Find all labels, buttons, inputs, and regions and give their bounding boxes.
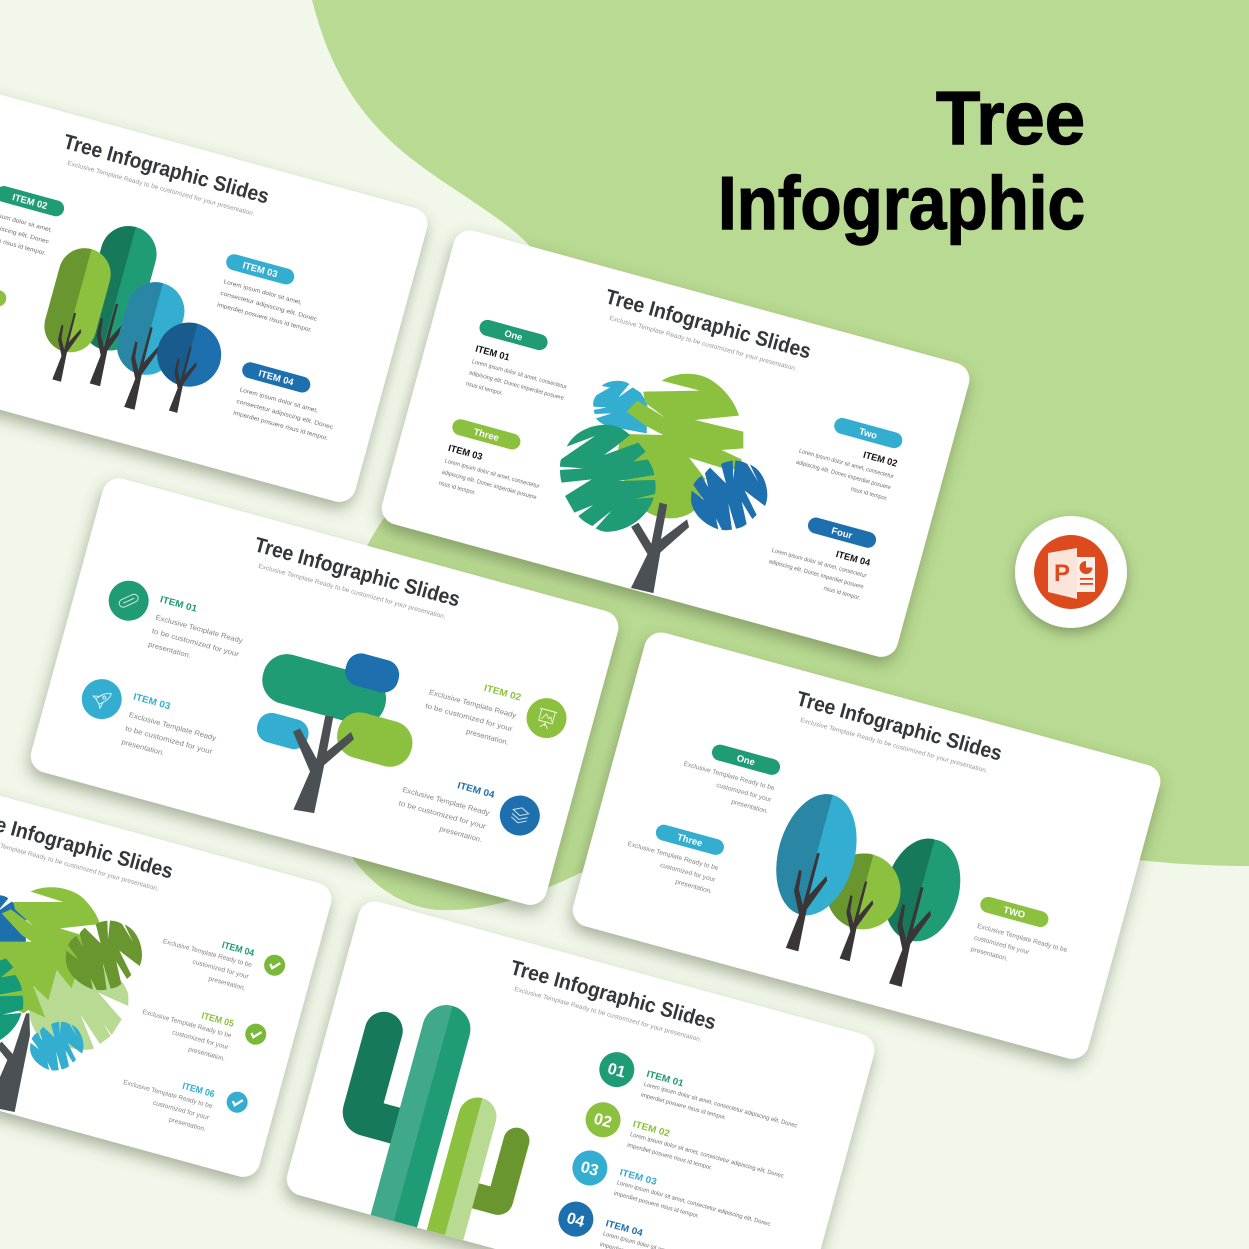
item 02 text	[626, 1119, 788, 1190]
slide 4: three oval trees	[569, 629, 1164, 1063]
pill: item 02: ITEM 02	[11, 192, 49, 212]
item 04 block: ITEM 04	[835, 549, 872, 569]
slide title: Tree Infographic Slides	[603, 285, 813, 364]
pill: item 03	[224, 252, 296, 286]
stem: teal	[371, 1000, 476, 1227]
tree: teal capsule	[66, 220, 163, 392]
text: Three: customized for your	[659, 862, 717, 884]
item 04 text: ITEM 04	[456, 780, 496, 801]
badge circle	[1015, 516, 1127, 628]
tree: teal oval	[861, 830, 971, 995]
item 01 text: to be customized for your	[151, 626, 241, 659]
item 03 block: risus id tempor.	[438, 481, 476, 497]
text: Two: presentation.	[970, 946, 1009, 963]
text: Three	[620, 841, 720, 896]
item 01 text: ITEM 01	[159, 594, 199, 615]
item 01 text	[640, 1069, 801, 1140]
badge 02	[582, 1098, 625, 1141]
leaf: lime	[618, 374, 743, 518]
leaf: blue	[691, 461, 767, 530]
pill: Three	[654, 823, 726, 857]
slide card	[0, 747, 335, 1181]
item 01 text: imperdiet posuere risus id tempor.	[640, 1092, 727, 1122]
badge 03	[568, 1146, 611, 1189]
item 04 text: Exclusive Template Ready to be	[162, 938, 253, 969]
icon: layers	[495, 791, 544, 840]
monstera tree illustration	[560, 374, 767, 599]
green background blob	[312, 0, 1249, 910]
item 02 text: ITEM 02	[631, 1119, 671, 1140]
stem: lime half	[427, 1093, 482, 1235]
text: item 02	[0, 202, 53, 257]
arm: olive	[471, 1121, 532, 1218]
slide 3: rounded block tree with icons	[27, 475, 622, 909]
pill: Two	[832, 416, 904, 450]
canopy: lime	[332, 707, 417, 772]
big cactus	[318, 985, 476, 1227]
pill: Two	[978, 895, 1050, 929]
slide card	[0, 72, 431, 506]
item 04 text: presentation.	[438, 824, 483, 844]
front page with P: P	[1054, 560, 1070, 587]
trunk	[273, 708, 358, 820]
trunk	[0, 1013, 30, 1112]
item 05 text: Exclusive Template Ready to be	[142, 1009, 233, 1040]
slide card	[27, 475, 622, 909]
pill: Three	[450, 417, 522, 451]
check icon: item 06	[224, 1089, 250, 1115]
text: One: customized for your	[715, 782, 773, 804]
item 04 text	[394, 767, 496, 844]
item 01 text: Exclusive Template Ready	[155, 613, 244, 645]
text: item 04	[232, 387, 337, 443]
monstera tree illustration	[0, 887, 142, 1112]
text: One: presentation.	[730, 799, 769, 815]
leaf: sky	[30, 1022, 83, 1070]
pill: One	[710, 743, 782, 777]
tree: blue round	[143, 315, 228, 420]
tree: sky oval	[754, 785, 869, 959]
item 01 block: Lorem ipsum dolor sit amet, consectetur	[471, 359, 567, 391]
item 03 text: presentation.	[121, 737, 165, 757]
trunk	[616, 497, 693, 599]
item 04 text: to be customized for your	[398, 798, 488, 831]
pill: One: One	[735, 753, 756, 768]
block tree illustration	[231, 629, 433, 835]
check icon: item 04	[262, 952, 287, 978]
icon: paperclip	[104, 576, 153, 625]
text: item 04: Lorem ipsum dolor sit amet,	[239, 387, 319, 415]
badge 04: 04	[565, 1210, 586, 1231]
item 03 text: ITEM 03	[618, 1167, 658, 1188]
pill: item 04	[240, 360, 312, 394]
pill: One: One	[503, 328, 524, 344]
item 03 block: adipiscing elit. Donec imperdiet posuere	[441, 470, 538, 501]
pill: Three: Three	[472, 427, 500, 444]
slide 6: multi-leaf monstera tree	[0, 747, 335, 1200]
item 03 block: Lorem ipsum dolor sit amet, consectetur	[444, 458, 540, 490]
item 04 text: Exclusive Template Ready	[401, 785, 491, 817]
item 06 text: presentation.	[168, 1116, 207, 1133]
tree: lime capsule	[31, 242, 117, 387]
arm: dark	[337, 1007, 424, 1144]
item 02 text: Lorem ipsum dolor sit amet, consectetur adipiscing elit. Donec	[629, 1132, 784, 1180]
text: item 03: Lorem ipsum dolor sit amet,	[223, 279, 303, 306]
slide 2: monstera tree	[371, 227, 973, 688]
stem: pale half	[445, 1098, 501, 1240]
slide card	[283, 898, 878, 1249]
item 05 text: presentation.	[187, 1046, 226, 1063]
item 03 text: Lorem ipsum dolor sit amet, consectetur adipiscing elit. Donec	[616, 1180, 771, 1228]
canopy: blue	[342, 650, 403, 696]
item 02 text	[421, 669, 523, 747]
item 01 block: risus id tempor.	[465, 381, 504, 397]
item 01 text: presentation.	[147, 640, 192, 660]
item 04 text	[156, 925, 257, 992]
item 03 text	[120, 692, 223, 770]
item 01 block	[465, 344, 572, 413]
item 02 text: to be customized for your	[424, 701, 514, 734]
item 03 block	[438, 443, 545, 512]
item 05 text: customized for your	[171, 1029, 230, 1051]
back page with pie	[1077, 557, 1095, 592]
pill: Four: Four	[830, 526, 854, 542]
item 06 text	[116, 1066, 217, 1133]
item 02 block: Lorem ipsum dolor sit amet, consectetur	[798, 449, 894, 480]
leaf: sky	[593, 381, 647, 433]
item 04 text: customized for your	[192, 959, 250, 981]
item 03 text: imperdiet posuere risus id tempor.	[613, 1191, 700, 1220]
text: One	[676, 761, 776, 816]
slide subtitle: Exclusive Template Ready to be customized for your presentation.	[513, 986, 703, 1044]
badge 01	[595, 1048, 638, 1091]
text: Two	[970, 923, 1068, 977]
slide 1: four capsule trees	[0, 72, 431, 506]
title line: Infographic: Infographic	[718, 161, 1085, 245]
slide 5: cactus	[283, 898, 878, 1249]
text: item 04: consectetur adipiscing elit. Donec	[236, 399, 334, 431]
slide card	[378, 227, 973, 661]
item 01 text: Lorem ipsum dolor sit amet, consectetur adipiscing elit. Donec	[643, 1082, 798, 1130]
item 04 text: presentation.	[208, 975, 246, 992]
slide subtitle: Exclusive Template Ready to be customized for your presentation.	[66, 160, 256, 218]
leaf: blue	[0, 895, 26, 948]
slide subtitle: Exclusive Template Ready to be customized for your presentation.	[257, 563, 447, 621]
item 02 block	[792, 433, 899, 503]
pill: item 03: ITEM 03	[241, 260, 279, 280]
canopy: teal	[257, 649, 392, 730]
text: One: Exclusive Template Ready to be	[683, 761, 776, 792]
stem: lighter half	[371, 1000, 453, 1221]
leaf: teal	[560, 425, 656, 532]
item 02 text: Exclusive Template Ready	[428, 687, 518, 720]
item 06 text: Exclusive Template Ready to be	[122, 1079, 213, 1110]
text: Three: Exclusive Template Ready to be	[627, 841, 719, 872]
canopy: sky	[254, 710, 312, 752]
pill: Two: Two	[858, 426, 878, 442]
icon: PowerPoint badge	[1015, 516, 1127, 628]
item 01 text: ITEM 01	[645, 1069, 685, 1090]
pill: item 01	[0, 274, 8, 308]
pill: Three: Three	[676, 832, 704, 849]
tree: sky capsule	[101, 276, 191, 416]
text: Two: customized for your	[973, 934, 1031, 956]
item 03 text	[613, 1167, 775, 1239]
item 03 text: ITEM 03	[132, 692, 172, 712]
pill: item 04: ITEM 04	[257, 368, 295, 389]
item 04 block: risus id tempor.	[823, 586, 861, 602]
text: item 03: imperdiet posuere risus id tempor.	[216, 302, 313, 334]
item 05 text: ITEM 05	[200, 1010, 236, 1030]
badge 02: 02	[592, 1111, 614, 1132]
text: Three: presentation.	[674, 879, 713, 895]
item 03 text: Exclusive Template Ready	[128, 710, 218, 743]
item 02 text: presentation.	[465, 727, 510, 747]
slide title: Tree Infographic Slides	[794, 687, 1004, 766]
item 02 block: ITEM 02	[862, 450, 898, 470]
pill: Four	[806, 516, 878, 550]
pill: Two: TWO	[1002, 905, 1026, 921]
item 02 text: ITEM 02	[483, 683, 522, 703]
item 01 text	[147, 594, 250, 672]
leaf: olive	[66, 921, 142, 990]
item 03 block: ITEM 03	[447, 443, 484, 463]
main title	[718, 76, 1085, 245]
item 02 block: risus id tempor.	[850, 487, 888, 502]
slide title: Tree Infographic Slides	[61, 130, 271, 209]
item 04 block: adipiscing elit. Donec imperdiet posuere	[768, 559, 865, 591]
item 02 block: adipiscing elit. Donec imperdiet posuere	[795, 460, 892, 491]
tree: lime oval	[809, 845, 909, 970]
item 04 text: ITEM 04	[604, 1218, 645, 1239]
slide title: Tree Infographic Slides	[508, 956, 718, 1035]
slide card	[569, 629, 1164, 1063]
item 06 text: customized for your	[152, 1100, 211, 1122]
slide subtitle: Exclusive Template Ready to be customized for your presentation.	[799, 717, 989, 775]
icon: presentation board	[522, 694, 571, 743]
item 06 text: ITEM 06	[181, 1081, 216, 1100]
title line: Tree: Tree	[936, 76, 1085, 160]
icon: rocket	[77, 675, 126, 724]
item 05 text	[135, 995, 237, 1063]
item 04 text: ITEM 04	[221, 940, 256, 959]
slide subtitle: Exclusive Template Ready to be customized for your presentation.	[608, 315, 798, 373]
item 01 block: adipiscing elit. Donec imperdiet posuere	[468, 370, 565, 402]
item 02 text: imperdiet posuere risus id tempor.	[626, 1143, 713, 1172]
slide title: Tree Infographic Slides	[252, 533, 462, 612]
badge 01: 01	[606, 1060, 627, 1082]
small cactus	[427, 1093, 537, 1249]
text: item 03	[216, 279, 321, 335]
red disc	[1034, 535, 1108, 609]
item 04 text	[599, 1218, 761, 1249]
check icon: item 05	[243, 1021, 269, 1047]
item 04 block	[765, 532, 872, 602]
leaf: lime	[0, 887, 100, 1017]
leaf: teal	[0, 940, 23, 1047]
pill: item 02	[0, 184, 66, 218]
pill: One	[478, 318, 549, 352]
text: item 03: consectetur adipiscing elit. Donec	[220, 291, 318, 323]
badge 03: 03	[579, 1159, 600, 1180]
item 03 text: to be customized for your	[124, 724, 214, 756]
item 04 block: Lorem ipsum dolor sit amet, consectetur	[771, 548, 867, 580]
text: item 04: imperdiet posuere risus id tempor.	[232, 410, 329, 442]
leaf: pale green	[29, 959, 128, 1050]
text: Two: Exclusive Template Ready to be	[976, 923, 1068, 954]
item 01 block: ITEM 01	[474, 344, 511, 364]
badge 04	[554, 1198, 597, 1241]
